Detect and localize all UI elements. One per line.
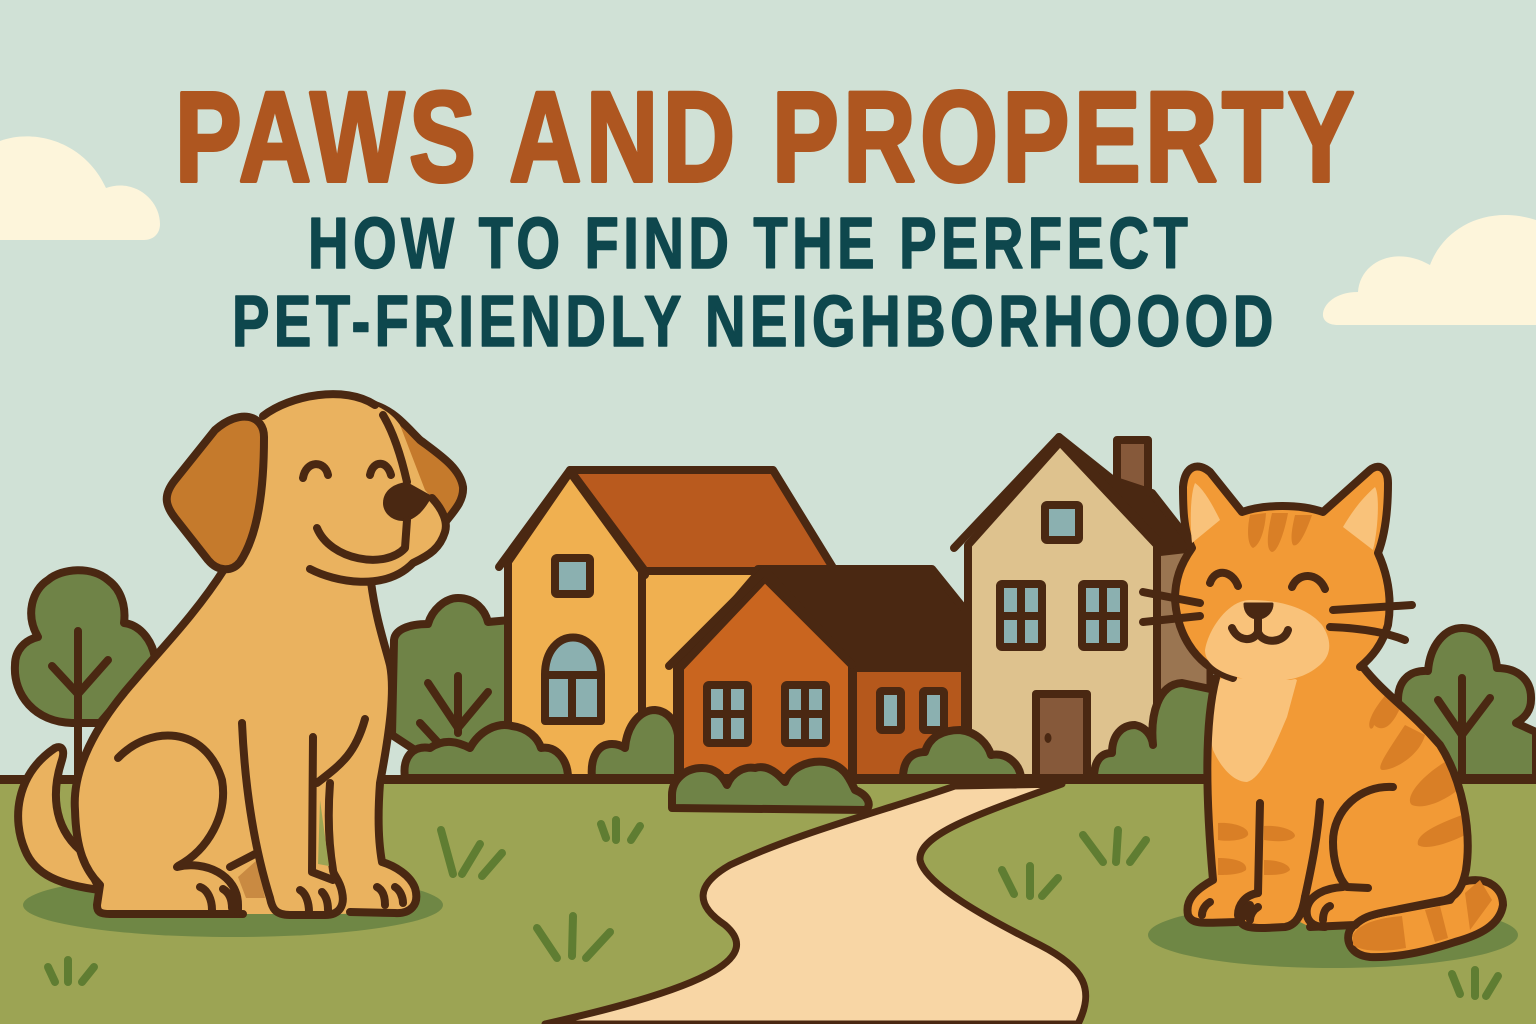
arched window [545,638,601,721]
orange house eave [669,570,852,666]
cat whiskers [1143,592,1412,640]
path [545,784,1086,1024]
cat head stripes [1248,513,1312,552]
cloud: right [1323,215,1536,325]
cat haunch [1333,787,1393,888]
bush: beside yellow house [592,710,678,778]
left house annex wall [642,571,760,778]
dog snout [310,498,446,582]
left window [1000,584,1042,647]
left house roof [570,470,835,571]
horizon line [0,775,1536,784]
cat muzzle [1205,600,1329,682]
cat right ear inner [1343,487,1378,550]
cat front legs [1258,802,1320,897]
dog front leg [242,723,343,915]
cat [1143,467,1503,957]
dog body [75,397,446,914]
small window [555,558,590,594]
house: cream right [954,437,1195,778]
door [1036,694,1087,778]
dog left ear [167,417,264,569]
bush: right [1094,683,1215,778]
bush: front centre [672,762,869,810]
ground [0,779,1536,1024]
dog nose [383,482,432,521]
cream house wall [968,442,1157,778]
cat belly [1208,660,1297,782]
tree: behind left house [392,598,510,760]
cat tail [1348,880,1503,957]
cat outline body [1187,678,1237,923]
cat nose [1245,604,1272,618]
grass tufts [48,820,1498,996]
right window [1082,584,1124,647]
subtitle line 2: PET-FRIENDLY NEIGHBORHOOOD [232,281,1273,362]
orange house side wing [853,668,965,778]
bush: under door side [903,730,1021,778]
tree: far right [1398,628,1536,778]
dog hind paw [177,853,257,912]
left house wall [508,472,642,778]
tree: far left [15,570,155,778]
dog tail [18,747,100,890]
cat body [1187,640,1468,927]
cream house eave [954,437,1157,548]
side window right [923,691,944,730]
house: dark tan far right side wall [1155,545,1210,695]
house: yellow left [499,470,835,778]
dog hind leg dark patch [238,860,265,898]
dog shadow [23,873,443,937]
bush: left [405,725,568,778]
cat body stripes [1218,690,1465,875]
cat paws [1238,887,1343,928]
dog [18,394,463,915]
subtitle line 1: HOW TO FIND THE PERFECT [308,203,1188,284]
orange house front wall [680,578,852,778]
cat shadow [1148,902,1518,968]
cat toes [1202,902,1330,920]
cat eyes [1210,573,1325,589]
front window left [707,685,748,743]
cream house roof [1059,437,1195,552]
title: PAWS AND PROPERTY [175,66,1354,209]
dog eyes [303,464,391,478]
dog toes [300,887,403,912]
cat head outline [1175,467,1390,678]
orange house dark roof [758,569,968,668]
dog outline [75,568,243,914]
dog inner head line [383,415,407,482]
left house gable eave [499,470,645,575]
cat tail stripes [1353,880,1492,951]
cloud: left [0,136,160,240]
dog mouth [317,520,407,560]
dog inner leg [312,719,365,880]
chimney [1117,440,1148,495]
dog haunch [118,735,223,866]
house: orange middle [669,569,968,778]
front window right [785,685,826,743]
cat mouth [1232,616,1288,641]
cat left ear inner [1191,483,1220,543]
dog right ear [375,405,463,520]
top window [1045,505,1079,540]
side window left [880,691,901,730]
gap between dog legs [318,800,329,866]
cat head [1175,467,1390,680]
